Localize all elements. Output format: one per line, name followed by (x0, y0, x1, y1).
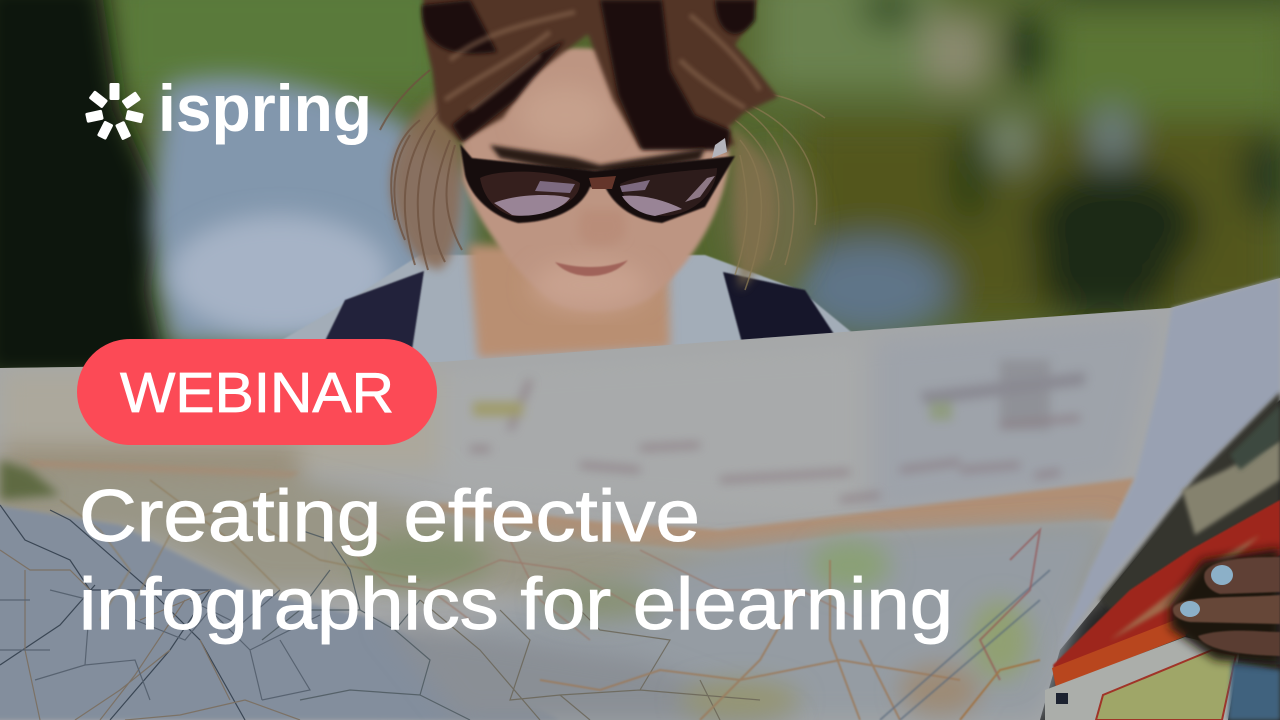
blurred landscape background (0, 0, 1280, 400)
main hair (423, 0, 778, 148)
red cover (1053, 500, 1280, 686)
brow shadow (490, 145, 705, 172)
dark bang strands (452, 0, 730, 150)
folded flap (1058, 278, 1280, 650)
lips (555, 260, 628, 276)
dark corner behind (1100, 392, 1280, 720)
chin highlight (532, 260, 648, 310)
webinar badge: WEBINAR (120, 361, 394, 425)
face (462, 48, 730, 311)
white shirt (282, 255, 855, 380)
title: infographics for elearning (79, 564, 953, 645)
dark foliage at left (0, 0, 170, 380)
woman (282, 0, 855, 380)
sunglasses (460, 138, 735, 223)
hand with red map cover (1045, 392, 1280, 720)
blurred map details (470, 360, 1085, 500)
pale water reflection (150, 76, 470, 345)
upper fold shading (0, 316, 1160, 520)
title (79, 476, 953, 645)
nose (579, 210, 626, 245)
hair side fill right (730, 125, 776, 290)
fingers (1170, 548, 1280, 665)
logo wordmark: ispring (158, 71, 372, 145)
backpack straps (322, 271, 834, 350)
title: Creating effective (79, 476, 700, 557)
sharp lower map (0, 505, 560, 720)
beige page patch (1182, 440, 1280, 535)
logo (85, 71, 372, 145)
warm blurred band on left (55, 477, 1108, 616)
dark green corner (0, 460, 60, 500)
open map (0, 278, 1280, 720)
webinar badge (77, 339, 437, 445)
neck and chest (468, 245, 670, 358)
light hair strands (445, 12, 760, 110)
hair mass (380, 0, 825, 290)
road network (0, 480, 1050, 720)
nails (1211, 565, 1233, 585)
hair wisps right (730, 90, 825, 290)
dark hair knots (422, 0, 497, 54)
map paper (0, 278, 1280, 720)
hair side fill left (391, 90, 462, 270)
map inset card (1045, 637, 1240, 720)
orange map band (430, 478, 1135, 552)
hair wisps left (380, 70, 462, 270)
logo burst (85, 83, 144, 140)
forehead highlight (520, 85, 610, 145)
